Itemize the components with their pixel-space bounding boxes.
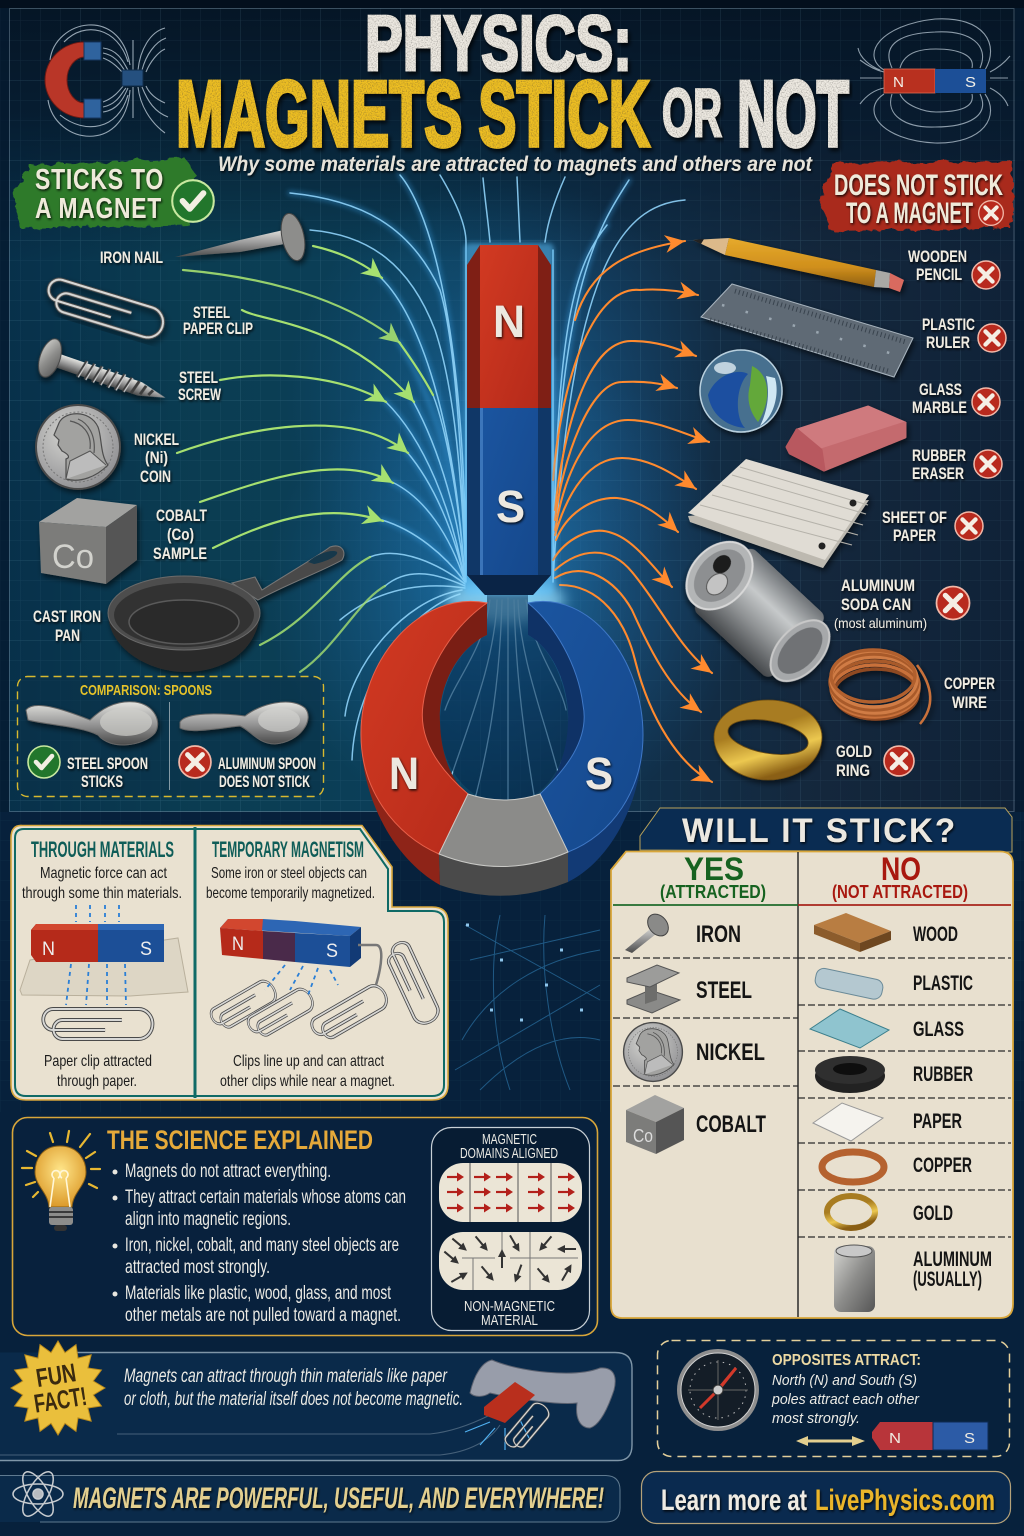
item: glass marble (700, 350, 1000, 432)
small bar magnet: S (964, 1430, 975, 1447)
item: cast iron pan (33, 546, 344, 672)
row: rubber: RUBBER (913, 1063, 973, 1086)
central horseshoe magnet: N (389, 748, 419, 799)
item: iron nail (100, 211, 309, 267)
row: glass (810, 1009, 964, 1048)
item: cast iron pan: PAN (55, 626, 80, 645)
heading badge: sticks to a magnet: STICKS TO (35, 164, 164, 196)
item: copper wire (830, 650, 995, 724)
item: plastic ruler (701, 284, 1006, 377)
item: glass marble: MARBLE (912, 398, 967, 417)
item: plastic ruler: RULER (926, 333, 970, 352)
temporary magnetism text (206, 837, 375, 902)
temporary magnetism text: TEMPORARY MAGNETISM (212, 837, 364, 862)
no header: NO (881, 851, 921, 887)
row: aluminum: ALUMINUM (913, 1248, 992, 1271)
fun fact starburst: FUN (34, 1357, 78, 1393)
science bullet list: other metals are not pulled toward a magnet. (125, 1305, 401, 1326)
science bullet list (112, 1161, 406, 1326)
fun fact text: or cloth, but the material itself does not become magnetic. (124, 1389, 463, 1410)
temporary magnetism text: Some iron or steel objects can (211, 865, 367, 882)
clips caption: Clips line up and can attract (233, 1053, 384, 1070)
item: cobalt sample: COBALT (156, 506, 207, 525)
row: cobalt: COBALT (696, 1111, 766, 1138)
item: rubber eraser (787, 407, 1002, 483)
central bar magnet (464, 243, 554, 595)
row: nickel (623, 1022, 765, 1082)
item: sheet of paper: PAPER (893, 526, 936, 545)
item: gold ring (714, 700, 914, 780)
panel: opposites attract (658, 1340, 1010, 1456)
opposites attract text: North (N) and South (S) (772, 1372, 917, 1389)
orange repulsion arrows (553, 241, 712, 782)
item: cobalt sample (39, 498, 207, 584)
icon: bar magnet with field lines: N (893, 74, 904, 91)
panel: through materials and temporary magnetism (11, 825, 448, 1100)
clips caption: other clips while near a magnet. (220, 1073, 395, 1090)
item: rubber eraser: ERASER (912, 464, 964, 483)
item: copper wire: COPPER (944, 674, 995, 693)
row: aluminum: (USUALLY) (913, 1268, 982, 1291)
item: steel screw: SCREW (178, 385, 222, 404)
panel: comparison spoons: COMPARISON: SPOONS (80, 682, 212, 699)
double arrow (796, 1436, 865, 1446)
item: plastic ruler: PLASTIC (922, 315, 975, 334)
row: aluminum (834, 1245, 992, 1312)
icon: bar magnet with field lines: S (965, 74, 976, 91)
item: steel screw (34, 336, 222, 417)
clips lining up illustration: N (232, 934, 244, 955)
item: glass marble: GLASS (919, 380, 962, 399)
small bar magnet: N (889, 1430, 901, 1447)
row: nickel: NICKEL (696, 1039, 765, 1066)
item: steel paper clip: PAPER CLIP (183, 319, 253, 338)
item: rubber eraser: RUBBER (912, 446, 966, 465)
item: wooden pencil (693, 238, 1000, 292)
item: nickel coin: NICKEL (134, 430, 179, 449)
item: gold ring: RING (836, 761, 870, 780)
title: OR (662, 75, 722, 151)
item: cobalt sample: (Co) (167, 525, 194, 544)
fun fact text (124, 1366, 463, 1410)
science bullet list: Magnets do not attract everything. (125, 1161, 331, 1182)
clips lining up illustration: S (326, 941, 338, 962)
item: cobalt sample: SAMPLE (153, 544, 207, 563)
item: gold ring: GOLD (836, 742, 872, 761)
row: gold (827, 1196, 953, 1228)
item: aluminum soda can: SODA CAN (841, 595, 911, 614)
heading badge: does not stick (820, 161, 1014, 231)
heading badge: sticks to a magnet (14, 158, 214, 228)
item: steel paper clip: STEEL (193, 303, 230, 322)
row: gold: GOLD (913, 1202, 953, 1225)
row: paper: PAPER (913, 1110, 962, 1133)
central horseshoe magnet (361, 578, 643, 896)
science bullet list: Iron, nickel, cobalt, and many steel objects are (125, 1235, 399, 1256)
opposites attract text: OPPOSITES ATTRACT: (772, 1352, 921, 1369)
magnetic domains diagram: MAGNETIC (482, 1131, 537, 1148)
icon: light bulb (22, 1131, 100, 1231)
icon: horseshoe magnet with field lines (45, 25, 168, 136)
through materials text: Magnetic force can act (40, 865, 167, 882)
item: wooden pencil: PENCIL (916, 265, 962, 284)
steel spoon verdict: STEEL SPOON (67, 754, 148, 773)
science bullet list: They attract certain materials whose atoms can (125, 1187, 406, 1208)
row: plastic (814, 967, 973, 1001)
aluminum spoon verdict: DOES NOT STICK (219, 772, 310, 791)
opposites attract text: poles attract each other (771, 1391, 920, 1408)
paper clip through paper illustration: N (42, 939, 55, 960)
fun fact starburst (11, 1341, 105, 1435)
item: wooden pencil: WOODEN (908, 247, 967, 266)
magnetic domains diagram (432, 1128, 590, 1330)
paper clip caption: through paper. (57, 1073, 137, 1090)
row: steel (627, 965, 752, 1013)
title (176, 0, 849, 166)
row: wood: WOOD (913, 923, 958, 946)
magnetic domains diagram: NON-MAGNETIC (464, 1298, 555, 1315)
item: nickel coin (35, 404, 179, 490)
fun fact starburst: FACT! (32, 1381, 89, 1419)
panel: bottom banner (0, 1467, 620, 1522)
through materials text (22, 837, 182, 902)
panel: learn more (642, 1472, 1010, 1524)
opposites attract text (771, 1352, 921, 1427)
row: copper: COPPER (913, 1154, 972, 1177)
item: aluminum soda can (670, 525, 970, 697)
opposites attract text: most strongly. (772, 1410, 860, 1427)
central horseshoe magnet: S (585, 748, 613, 799)
small bar magnet (872, 1422, 988, 1450)
panel: comparison spoons (18, 676, 324, 796)
panel: will it stick table (611, 808, 1013, 1318)
magnetic domains diagram: MATERIAL (481, 1312, 538, 1329)
yes header: YES (684, 851, 744, 887)
fun fact illustration (465, 1360, 615, 1453)
will it stick heading: WILL IT STICK? (682, 812, 957, 850)
item: sheet of paper (688, 459, 983, 568)
title: PHYSICS: (365, 0, 632, 87)
subtitle: Why some materials are attracted to magnets and others are not (218, 153, 813, 176)
row: cobalt (626, 1095, 766, 1154)
item: cast iron pan: CAST IRON (33, 607, 101, 626)
central bar magnet: S (496, 481, 525, 532)
row: wood (814, 913, 958, 952)
aluminum spoon verdict (179, 746, 316, 791)
temporary magnetism text: become temporarily magnetized. (206, 885, 375, 902)
row: cobalt: Co (633, 1126, 653, 1146)
row: rubber (815, 1056, 973, 1093)
no header: (NOT ATTRACTED) (832, 882, 968, 902)
paper clip caption: Paper clip attracted (44, 1053, 152, 1070)
no header (832, 851, 968, 902)
steel spoon verdict: STICKS (81, 772, 123, 791)
through materials text: THROUGH MATERIALS (31, 837, 174, 862)
row: copper (822, 1152, 972, 1182)
paper clip caption (44, 1053, 152, 1090)
steel spoon (26, 702, 158, 745)
fun fact text: Magnets can attract through thin materials like paper (124, 1366, 447, 1387)
steel spoon verdict (28, 746, 148, 791)
science bullet list: Materials like plastic, wood, glass, and most (125, 1283, 392, 1304)
item: copper wire: WIRE (952, 693, 987, 712)
science bullet list: attracted most strongly. (125, 1257, 270, 1278)
item: aluminum soda can: ALUMINUM (841, 576, 915, 595)
science bullet list: align into magnetic regions. (125, 1209, 291, 1230)
item: nickel coin: COIN (140, 467, 171, 486)
faint field network (455, 915, 600, 1090)
icon: atom (13, 1467, 63, 1521)
row: iron (625, 910, 741, 953)
row: glass: GLASS (913, 1018, 964, 1041)
magnetic field lines (290, 175, 685, 800)
paper clip through paper illustration (20, 905, 188, 1039)
item: iron nail: IRON NAIL (100, 248, 163, 267)
row: paper (813, 1103, 962, 1141)
panel: fun fact (0, 1341, 632, 1460)
closing slogan: MAGNETS ARE POWERFUL, USEFUL, AND EVERYWHERE! (73, 1482, 604, 1515)
item: steel screw: STEEL (179, 368, 218, 387)
panel: the science explained (12, 1118, 598, 1336)
item: nickel coin: (Ni) (145, 448, 168, 467)
icon: compass (677, 1349, 759, 1431)
panel: learn more: Learn more at (661, 1484, 807, 1517)
icon: bar magnet with field lines (858, 19, 1010, 143)
heading badge: sticks to a magnet: A MAGNET (35, 193, 162, 225)
green attraction arrows (177, 246, 433, 672)
will it stick heading (640, 808, 1012, 852)
yes header (660, 851, 766, 902)
yes header: (ATTRACTED) (660, 882, 766, 902)
through materials text: through some thin materials. (22, 885, 182, 902)
item: aluminum soda can: (most aluminum) (834, 615, 927, 631)
clips caption (220, 1053, 395, 1090)
title: MAGNETS STICK (176, 61, 650, 166)
row: iron: IRON (696, 921, 741, 948)
title: NOT (737, 61, 849, 166)
paper clip through paper illustration: S (140, 939, 152, 960)
central bar magnet: N (493, 296, 525, 347)
clips lining up illustration (208, 919, 442, 1044)
aluminum spoon verdict: ALUMINUM SPOON (218, 754, 316, 773)
row: plastic: PLASTIC (913, 972, 973, 995)
row: steel: STEEL (696, 977, 752, 1004)
item: cobalt sample: Co (52, 538, 94, 576)
aluminum spoon (180, 702, 308, 744)
item: steel paper clip (43, 277, 253, 341)
magnetic domains diagram: DOMAINS ALIGNED (460, 1145, 558, 1162)
item: sheet of paper: SHEET OF (882, 508, 947, 527)
science heading: THE SCIENCE EXPLAINED (107, 1125, 373, 1155)
